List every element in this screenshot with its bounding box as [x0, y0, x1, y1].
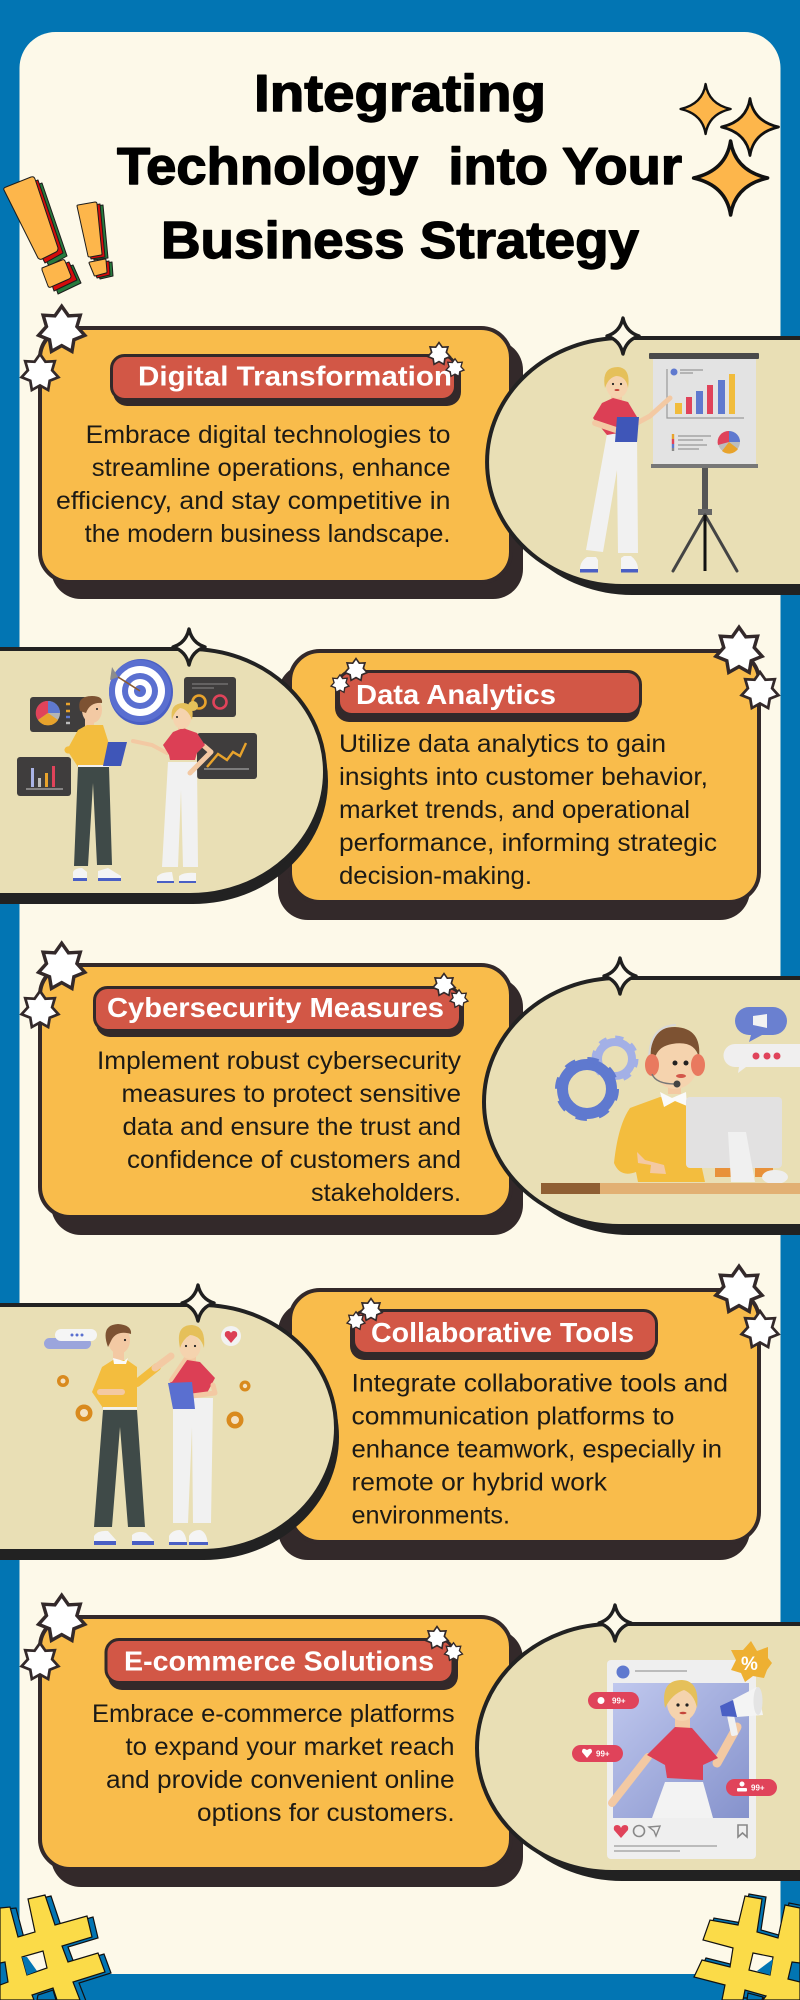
icon: exclamation marks	[4, 177, 113, 294]
speech bubbles and heart	[44, 1326, 241, 1349]
notification badges: 99+	[596, 1750, 610, 1758]
heading pill: Data Analytics	[356, 679, 556, 710]
shape body	[487, 338, 800, 586]
body text	[56, 421, 450, 548]
body text	[92, 1700, 455, 1827]
heading pill	[106, 1640, 458, 1690]
card body	[290, 1290, 759, 1542]
illustration panel: support agent	[484, 958, 800, 1235]
chart board on tripod	[649, 353, 759, 571]
icon: white stars	[22, 1595, 462, 1679]
heading pill	[350, 1310, 656, 1360]
icon: gold sparkles	[681, 84, 778, 215]
icon: sparkle	[604, 958, 636, 994]
heading pill	[112, 356, 461, 406]
body text: Embrace e-commerce platforms	[92, 1700, 455, 1728]
target with arrow	[109, 659, 173, 725]
heading pill	[335, 672, 640, 722]
icon: gears	[558, 1038, 636, 1118]
woman presenting	[580, 367, 670, 572]
body text: the modern business landscape.	[85, 520, 450, 548]
body text	[97, 1047, 462, 1207]
heading pill: E-commerce Solutions	[124, 1646, 434, 1676]
woman with megaphone	[612, 1680, 737, 1818]
illustration panel: presenter with chart	[487, 318, 800, 595]
card body	[40, 328, 511, 582]
icon: sparkle	[607, 318, 639, 354]
icon: percent badge	[731, 1641, 772, 1682]
icon: hash bottom right	[694, 1894, 800, 2000]
panel: e-commerce solutions	[22, 1595, 523, 1887]
shape shadow	[497, 347, 800, 595]
card shadow	[278, 664, 750, 920]
heading pill: Collaborative Tools	[371, 1317, 634, 1348]
notification badges: 99+	[751, 1784, 765, 1792]
icon: sparkle	[599, 1605, 631, 1641]
icon: white stars	[331, 627, 778, 708]
icon: percent badge: %	[741, 1654, 758, 1675]
shape shadow	[0, 1314, 339, 1560]
body text: confidence of customers and	[127, 1146, 461, 1174]
body text: communication platforms to	[352, 1402, 674, 1430]
speech bubbles	[724, 1007, 800, 1073]
card shadow	[278, 1302, 750, 1560]
body text: efficiency, and stay competitive in	[56, 487, 450, 515]
body text: measures to protect sensitive	[122, 1080, 461, 1108]
body text: environments.	[352, 1502, 510, 1530]
icon: sparkle	[173, 629, 205, 665]
shape body	[477, 1624, 800, 1872]
icon: white stars	[22, 943, 468, 1027]
body text: performance, informing strategic	[339, 829, 717, 857]
body text: remote or hybrid work	[352, 1468, 608, 1496]
woman with tablet	[168, 1325, 215, 1545]
shape body	[0, 649, 325, 895]
dashboard tiles	[17, 677, 257, 796]
shape body	[484, 978, 800, 1226]
body text: Integrate collaborative tools and	[352, 1370, 728, 1398]
coins	[57, 1375, 250, 1428]
heading pill: Cybersecurity Measures	[107, 992, 444, 1023]
icon: white stars	[347, 1266, 778, 1347]
body text: stakeholders.	[311, 1179, 461, 1207]
shape shadow	[494, 987, 800, 1235]
notification badges: 99+	[612, 1696, 626, 1706]
megaphone	[720, 1687, 763, 1736]
body text: options for customers.	[197, 1799, 455, 1827]
body text: enhance teamwork, especially in	[352, 1436, 722, 1464]
body text: Implement robust cybersecurity	[97, 1047, 462, 1075]
shape shadow	[0, 658, 328, 904]
panel: digital transformation	[22, 306, 523, 599]
shape shadow	[487, 1633, 800, 1881]
heading pill	[94, 988, 464, 1037]
panel: cybersecurity measures	[22, 943, 523, 1235]
heading pill: Digital Transformation	[138, 360, 452, 392]
title	[117, 65, 682, 270]
card body	[40, 965, 511, 1217]
body text	[339, 730, 717, 890]
post card	[607, 1660, 756, 1859]
card shadow	[51, 340, 523, 599]
card shadow	[51, 977, 523, 1235]
body text: and provide convenient online	[106, 1766, 455, 1794]
card shadow	[51, 1629, 523, 1887]
illustration panel: analysts with charts	[0, 629, 328, 904]
title: Integrating	[254, 65, 546, 123]
body text: Utilize data analytics to gain	[339, 730, 666, 758]
body text: insights into customer behavior,	[339, 763, 708, 791]
card body	[40, 1617, 511, 1869]
title: Business Strategy	[161, 212, 639, 270]
icon: sparkle	[182, 1285, 214, 1321]
desk	[541, 1183, 800, 1194]
panel: collaborative tools	[278, 1266, 778, 1560]
body text: to expand your market reach	[126, 1733, 454, 1761]
body text: streamline operations, enhance	[92, 454, 451, 482]
body text: market trends, and operational	[339, 796, 690, 824]
panel: data analytics	[278, 627, 778, 920]
body text: Embrace digital technologies to	[86, 421, 450, 449]
shape body	[0, 1305, 336, 1551]
notification badges	[572, 1692, 777, 1796]
body text	[352, 1370, 728, 1530]
card body	[290, 651, 759, 902]
woman gesturing	[133, 701, 211, 883]
title: Technology into Your	[117, 138, 682, 196]
agent at desk	[614, 1025, 705, 1182]
body text: decision-making.	[339, 862, 532, 890]
man with clipboard	[67, 696, 127, 881]
icon: white stars	[22, 306, 464, 390]
man talking	[92, 1324, 171, 1545]
icon: hash bottom left	[0, 1895, 111, 2000]
monitor	[686, 1097, 788, 1184]
body text: data and ensure the trust and	[122, 1113, 461, 1141]
illustration panel: colleagues talking	[0, 1285, 339, 1560]
illustration panel: social media post	[477, 1605, 800, 1881]
